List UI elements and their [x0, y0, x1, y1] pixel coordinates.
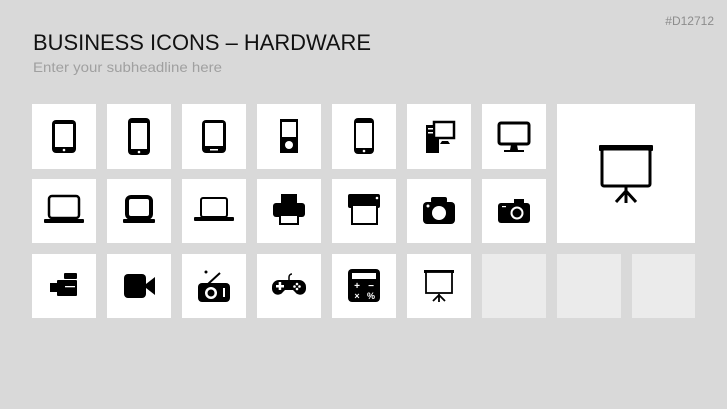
tile grid: [32, 104, 695, 318]
icon: radio: [198, 270, 230, 302]
icon: printer: [273, 194, 305, 224]
icon: fax machine: [348, 194, 380, 224]
icon: calculator: +: [354, 281, 360, 292]
icon: calculator: %: [367, 291, 375, 301]
icon: tablet landscape-button: [202, 120, 226, 153]
icon: video camera: [124, 274, 155, 298]
icon: laptop 1: [44, 196, 84, 223]
icon: projector screen small: [424, 270, 454, 302]
code label: #D12712: [665, 14, 714, 28]
icon: calculator: [348, 269, 380, 302]
icon: smartphone: [128, 118, 150, 155]
icon: gamepad: [272, 274, 306, 295]
icon: camera 1: [423, 197, 455, 224]
icon: camera 2: [498, 199, 530, 223]
icon: tablet: [52, 120, 76, 153]
subtitle: Enter your subheadline here: [33, 59, 222, 75]
icon: projector screen large: [599, 145, 653, 203]
icon: camcorder: [50, 273, 77, 296]
title: BUSINESS ICONS – HARDWARE: [33, 30, 371, 55]
icon: laptop 3: [194, 198, 234, 221]
icon: phone: [354, 118, 374, 154]
icon: laptop 2: [123, 197, 155, 223]
icon: calculator: ×: [354, 291, 360, 301]
icon: desktop pc: [426, 122, 454, 153]
icon: calculator: −: [368, 281, 374, 292]
icon: monitor: [499, 123, 529, 152]
icon: music player: [280, 119, 298, 153]
